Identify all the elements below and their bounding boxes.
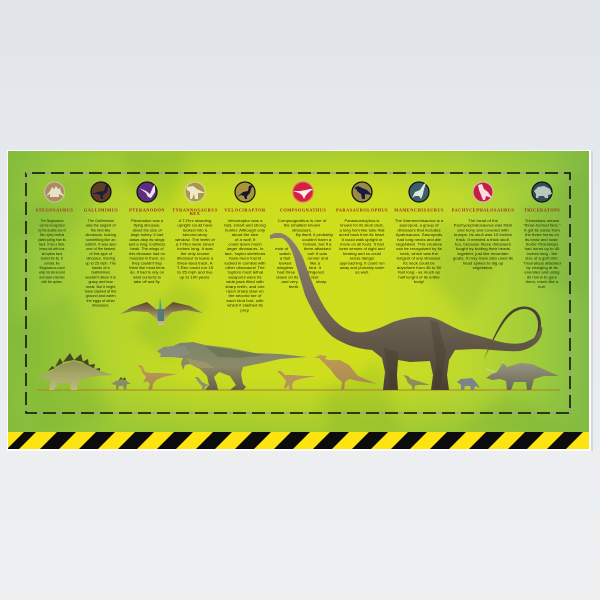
text: stegosaurus: and slash enemies xyxy=(39,275,65,280)
text: compsognathus: By itself, it probably xyxy=(296,232,333,237)
dinosaur: parasaurolophus xyxy=(314,355,377,390)
icon: gallimimus badge xyxy=(91,182,111,202)
text: gallimimus xyxy=(85,219,117,308)
dinosaur: triceratops xyxy=(486,361,559,390)
text: mamenchisaurus: anywhere from 36 to 50 xyxy=(397,265,442,270)
text: velociraptor: Velociraptor was a xyxy=(227,218,263,223)
text: velociraptor: locked in combat with xyxy=(225,261,265,265)
text: compsognathus: like a xyxy=(310,261,321,265)
text: triceratops: Triceratops attacked xyxy=(523,260,561,265)
text: gallimimus: meat. But it might xyxy=(86,285,116,289)
text: triceratops: size of a golf club. xyxy=(525,256,559,261)
icon: parasaurolophus badge xyxy=(352,182,372,202)
text: mamenchisaurus: half lenght of its entire xyxy=(398,275,441,279)
text: gallimimus: have clawed at the xyxy=(85,290,117,294)
text: velociraptor: 'raptors most lethal xyxy=(227,270,263,275)
text: tyrannosaurus rex: a T-Rex were seven xyxy=(176,242,214,246)
text: velociraptor: sharp teeth, and one xyxy=(225,284,265,289)
text: pteranodon: Pteranodon was a xyxy=(131,218,163,223)
text: compsognathus: Compsognathus is one of xyxy=(278,218,326,223)
text: parasaurolophus: a long horn-like tube that xyxy=(340,228,385,232)
text: gallimimus: The Gallimimus xyxy=(88,219,114,223)
text: tyrannosaurus rex: to 25 mph and live xyxy=(177,270,213,275)
text: pteranodon xyxy=(129,218,165,284)
text: mamenchisaurus: vegetation. This creature xyxy=(396,242,443,246)
text: tyrannosaurus rex: the only known xyxy=(181,251,209,256)
text: parasaurolophus xyxy=(339,218,385,275)
text: pachycephalosaurus: The head of the xyxy=(468,218,498,223)
text: pachycephalosaurus: too, because these dinosaurs xyxy=(455,242,511,246)
text: parasaurolophus: away and probably swim xyxy=(340,265,385,270)
text: gallimimus: of this type of xyxy=(89,252,113,256)
icon: triceratops badge xyxy=(532,182,552,202)
text: velociraptor: razor sharp claw on xyxy=(226,289,264,293)
text: tyrannosaurus rex: T-Rex could run 15 xyxy=(177,265,214,270)
text: gallimimus: dinosaurs, looking xyxy=(85,233,116,237)
text: tyrannosaurus rex: second-story xyxy=(183,232,208,237)
text: compsognathus: teeth. xyxy=(289,284,299,289)
text: velociraptor: larger dinosaurs. In xyxy=(227,246,263,251)
text: triceratops: It got its name from xyxy=(524,228,561,232)
text: compsognathus: them attacked xyxy=(304,246,331,251)
text: compsognathus: and very xyxy=(281,279,299,284)
text: triceratops: its brow and nose. xyxy=(525,237,559,242)
text: stegosaurus: toward the tip. In xyxy=(41,256,63,261)
text: parasaurolophus: It could walk upright or xyxy=(342,237,383,242)
text: pachycephalosaurus: head spikes to dig up xyxy=(463,261,504,265)
text: stegosaurus xyxy=(38,219,66,284)
text: parasaurolophus: keen senses of sight and xyxy=(339,246,385,251)
text: triceratops: Some Triceratops xyxy=(526,242,558,246)
text: mamenchisaurus: The Mamenchisaurus is a xyxy=(395,218,443,223)
text: pachycephalosaurus: and bony and covered with xyxy=(457,228,509,232)
text: tyrannosaurus rex: A T-Rex standing xyxy=(179,218,211,223)
text: stegosaurus: The Stegosaurus xyxy=(40,219,64,223)
text: triceratops: its horns to gore xyxy=(527,275,558,279)
text: gallimimus: dinosaurs. xyxy=(92,304,109,308)
text: compsognathus xyxy=(275,218,334,289)
text: pteranodon: muscles in them, so xyxy=(129,256,165,261)
text: pteranodon: wind currents to xyxy=(133,274,161,279)
heading: pteranodon: PTERANODON xyxy=(129,208,165,213)
text: pteranodon: them like most birds xyxy=(129,265,165,270)
text: pachycephalosaurus: bumps. Its skull was 10 inches xyxy=(454,232,512,237)
dinosaur: pteranodon xyxy=(120,297,203,325)
text: compsognathus: feet xyxy=(311,275,319,279)
text: compsognathus: couldn't harm a xyxy=(302,237,332,242)
text: gallimimus: ground and eaten xyxy=(86,294,116,298)
dinosaur: gallimimus xyxy=(137,365,177,390)
text: stegosaurus: thin, spiny vertical xyxy=(40,233,64,237)
text: gallimimus: Gallimimus xyxy=(91,271,110,275)
text: stegosaurus: back. It has a thick, xyxy=(39,242,65,247)
hazard stripe band xyxy=(8,432,589,449)
text: velociraptor: which it slashed its xyxy=(227,303,263,308)
heading: pachycephalosaurus: PACHYCEPHALOSAURUS xyxy=(452,208,514,213)
text: gallimimus: grasp and tear xyxy=(88,280,114,284)
text: parasaurolophus: as well. xyxy=(355,270,369,275)
text: velociraptor: of a wolf, it xyxy=(235,237,256,242)
text: tyrannosaurus rex: dinosaur to leave a xyxy=(177,256,214,261)
text: pteranodon: and a long, toothless xyxy=(129,242,165,246)
text: parasaurolophus: Parasaurolophus is xyxy=(345,218,379,223)
dinosaur: small raptor xyxy=(195,377,211,390)
ground line xyxy=(37,390,560,391)
icon: velociraptor badge xyxy=(235,182,255,202)
dinosaur: small parasaurolophus xyxy=(403,375,430,390)
text: compsognathus: bird. It xyxy=(309,265,322,270)
text: parasaurolophus: arced back from its head. xyxy=(339,232,385,237)
text: triceratops: enemies and using xyxy=(524,270,560,275)
dinosaur: velociraptor xyxy=(277,371,316,390)
text: velociraptor: weapons were its xyxy=(228,275,262,279)
heading: triceratops: TRICERATOPS xyxy=(524,208,560,213)
heading: stegosaurus: STEGOSAURUS xyxy=(36,208,73,213)
text: pachycephalosaurus: thick. It needed a thick skull, xyxy=(456,237,510,242)
text: mamenchisaurus: body! xyxy=(414,279,424,284)
dinosaur: tyrannosaurus rex xyxy=(157,342,307,390)
text: mamenchisaurus: sauropod, a group of xyxy=(399,223,439,228)
text: pteranodon: this dinosaur had no xyxy=(129,251,165,256)
dinosaur: mamenchisaurus xyxy=(270,233,542,390)
text: pteranodon: about the size of xyxy=(132,227,163,232)
text: gallimimus: hands of a xyxy=(92,266,110,270)
text: velociraptor: hunter. Although only xyxy=(225,228,266,232)
heading: mamenchisaurus: MAMENCHISAURUS xyxy=(394,208,444,213)
text: mamenchisaurus: can be recognized by its xyxy=(396,246,442,251)
text: gallimimus: the bird-like xyxy=(91,228,111,232)
text: triceratops: "three-horned face." xyxy=(523,223,561,228)
text: parasaurolophus: approaching. It could run xyxy=(340,260,384,265)
text: pteranodon: claws atop its wings xyxy=(129,237,165,242)
text: parasaurolophus: hearing and so could xyxy=(343,251,381,256)
text: triceratops: had horns up to 40 xyxy=(525,246,560,251)
text: triceratops xyxy=(523,218,561,289)
icon: stegosaurus badge xyxy=(44,182,65,202)
heading: tyrannosaurus rex: REX xyxy=(190,211,201,216)
text: mamenchisaurus: longest of any dinosaur. xyxy=(397,256,441,261)
text: gallimimus: dinosaur, moving xyxy=(86,257,115,261)
text: compsognathus: out! It was xyxy=(307,251,327,256)
text: stegosaurus: combat, the xyxy=(44,261,60,265)
text: mamenchisaurus: neck, which was the xyxy=(400,251,439,256)
text: velociraptor: fact, 'raptor skeletons xyxy=(225,251,265,256)
dinosaur: stegosaurus xyxy=(37,353,113,390)
text: velociraptor: fast, smart and strong xyxy=(224,223,266,228)
text: stegosaurus: can be recognized xyxy=(40,223,64,228)
dinosaur: small stegosaurus xyxy=(111,377,131,390)
text: stegosaurus: tail spikes back xyxy=(42,252,63,256)
text: stegosaurus: heavy tail with four xyxy=(39,247,65,251)
text: tyrannosaurus rex: upright could have xyxy=(177,223,213,228)
text: pachycephalosaurus: vegetation. xyxy=(473,265,493,270)
text: compsognathus: watch xyxy=(279,251,291,256)
text: compsognathus: looked xyxy=(279,261,291,265)
text: stegosaurus: Stegosaurus could xyxy=(39,266,65,270)
text: parasaurolophus: sense danger xyxy=(350,256,375,261)
text: velociraptor xyxy=(224,218,266,312)
heading: parasaurolophus: PARASAUROLOPHUS xyxy=(336,208,388,213)
text: velociraptor: prey. xyxy=(240,308,250,312)
text: pteranodon: they couldn't flap xyxy=(132,260,162,265)
text: mamenchisaurus: Apatosaurus. Sauropods xyxy=(396,232,442,237)
text: pachycephalosaurus: goats. It may have also used its xyxy=(453,256,513,261)
dinosaur: small triceratops xyxy=(457,378,480,390)
heading: gallimimus: GALLIMIMUS xyxy=(84,208,118,213)
text: compsognathus: a fast xyxy=(280,256,291,261)
text: tyrannosaurus rex: window. The teeth of xyxy=(175,237,216,242)
text: gallimimus: the eggs of other xyxy=(86,299,116,303)
text: compsognathus: human, but if a xyxy=(303,242,332,246)
icon: pachycephalosaurus badge xyxy=(473,182,493,202)
heading: tyrannosaurus rex: TYRANNOSAURUS xyxy=(172,208,218,213)
text: mamenchisaurus: feet long - as much as xyxy=(398,270,440,275)
text: compsognathus: fingered xyxy=(308,270,324,275)
text: velociraptor: wide jaws filled with xyxy=(226,279,264,284)
text: triceratops: inches long - the xyxy=(527,251,558,256)
heading: velociraptor: VELOCIRAPTOR xyxy=(224,208,266,213)
text: gallimimus: wouldn't allow it to xyxy=(85,275,116,279)
text: triceratops: the three horns on xyxy=(525,232,559,237)
text: velociraptor: about the size xyxy=(232,232,259,237)
dashed film-strip frame xyxy=(26,173,570,413)
text: compsognathus: claws on its xyxy=(276,275,298,279)
text: pachycephalosaurus: together, just like mountain xyxy=(457,251,509,256)
text: gallimimus: ostrich. It was also xyxy=(85,242,116,246)
text: stegosaurus: whip his tail around xyxy=(39,270,65,275)
text: tyrannosaurus rex xyxy=(175,218,216,279)
text: triceratops: bull. xyxy=(538,284,546,289)
text: compsognathus: dinosaurs. xyxy=(292,228,312,232)
text: parasaurolophus: known for its skull crest, xyxy=(340,223,384,228)
text: tyrannosaurus rex: inches long. It was xyxy=(177,246,213,251)
text: pteranodon: take off and fly. xyxy=(134,279,160,284)
text: compsognathus: mob of xyxy=(275,246,288,251)
text: parasaurolophus: move on all fours. It had xyxy=(340,242,384,246)
text: gallimimus: one of the fastest xyxy=(86,247,116,251)
text: gallimimus: something like an xyxy=(86,238,115,242)
text: pachycephalosaurus: Pachycephalosaurus was thick xyxy=(454,223,513,228)
text: triceratops: them, much like a xyxy=(526,279,559,284)
text: triceratops: Triceratops means xyxy=(525,218,559,223)
text: compsognathus: sharp xyxy=(316,279,327,284)
text: mamenchisaurus: Its neck could be xyxy=(403,261,436,265)
text: pteranodon: flying dinosaur, xyxy=(134,223,160,228)
text: mamenchisaurus: dinosaurs that includes xyxy=(397,228,441,232)
text: gallimimus: was the largest of xyxy=(86,224,117,228)
text: mamenchisaurus: had long necks and ate xyxy=(397,237,442,242)
text: velociraptor: other dinosaurs! The xyxy=(225,265,265,270)
text: gallimimus: up to 25 mph. The xyxy=(85,261,116,265)
icon: pteranodon badge xyxy=(137,182,157,202)
text: pteranodon: do. It had to rely on xyxy=(130,270,164,275)
text: compsognathus: the smallest known xyxy=(284,223,320,228)
text: compsognathus: runner and xyxy=(307,256,328,261)
text: velociraptor: each hind foot, with xyxy=(227,298,263,303)
poster xyxy=(7,150,593,451)
text: triceratops: by charging at its xyxy=(526,265,558,270)
text: pteranodon: beak. The wings of xyxy=(130,246,165,251)
text: compsognathus: had three xyxy=(277,270,296,275)
icon: compsognathus badge xyxy=(293,182,313,202)
text: tyrannosaurus rex: looked into a xyxy=(183,228,208,232)
text: stegosaurus: with the spines. xyxy=(42,280,63,284)
text: tyrannosaurus rex: up to 100 years. xyxy=(180,275,210,279)
icon: tyrannosaurus badge xyxy=(185,182,205,202)
text: velociraptor: the second toe of xyxy=(229,293,262,298)
text: mamenchisaurus xyxy=(395,218,444,284)
text: stegosaurus: by the double row of xyxy=(38,228,66,233)
text: stegosaurus: plates jutting from its xyxy=(38,237,66,242)
icon: mamenchisaurus badge xyxy=(409,182,429,202)
text: pachycephalosaurus xyxy=(453,218,513,270)
text: tyrannosaurus rex: three-toed track. A xyxy=(177,261,213,265)
text: compsognathus: wingless xyxy=(277,265,293,270)
text: pachycephalosaurus: fought by butting their heads xyxy=(456,246,510,251)
text: velociraptor: could down much xyxy=(228,242,262,246)
text: velociraptor: have been found xyxy=(229,256,261,261)
text: pteranodon: large turkey. It had xyxy=(131,232,163,237)
heading: compsognathus: COMPSOGNATHUS xyxy=(280,208,326,213)
